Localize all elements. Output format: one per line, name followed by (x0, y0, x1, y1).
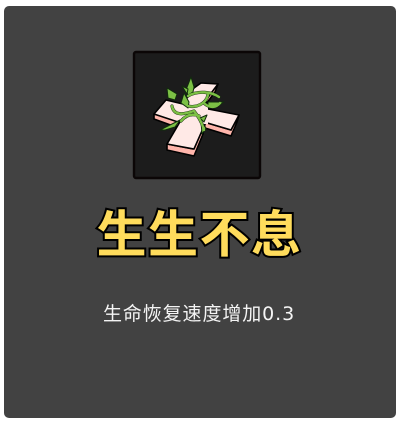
left arm (154, 100, 200, 127)
cross arms (154, 83, 239, 156)
centre (182, 104, 208, 124)
vine stems (172, 92, 220, 130)
bottom arm (167, 120, 205, 156)
title: 生生不息 (96, 195, 302, 267)
icon: cross of pink bandage wrapped in green vine (132, 50, 262, 180)
top arm (180, 83, 218, 110)
icon frame (134, 52, 260, 178)
vine stem outline (172, 92, 220, 130)
vine and leaves (160, 77, 224, 134)
right arm (198, 107, 239, 136)
description text: 生命恢复速度增加0.3 (103, 303, 295, 325)
leaves (160, 77, 224, 134)
